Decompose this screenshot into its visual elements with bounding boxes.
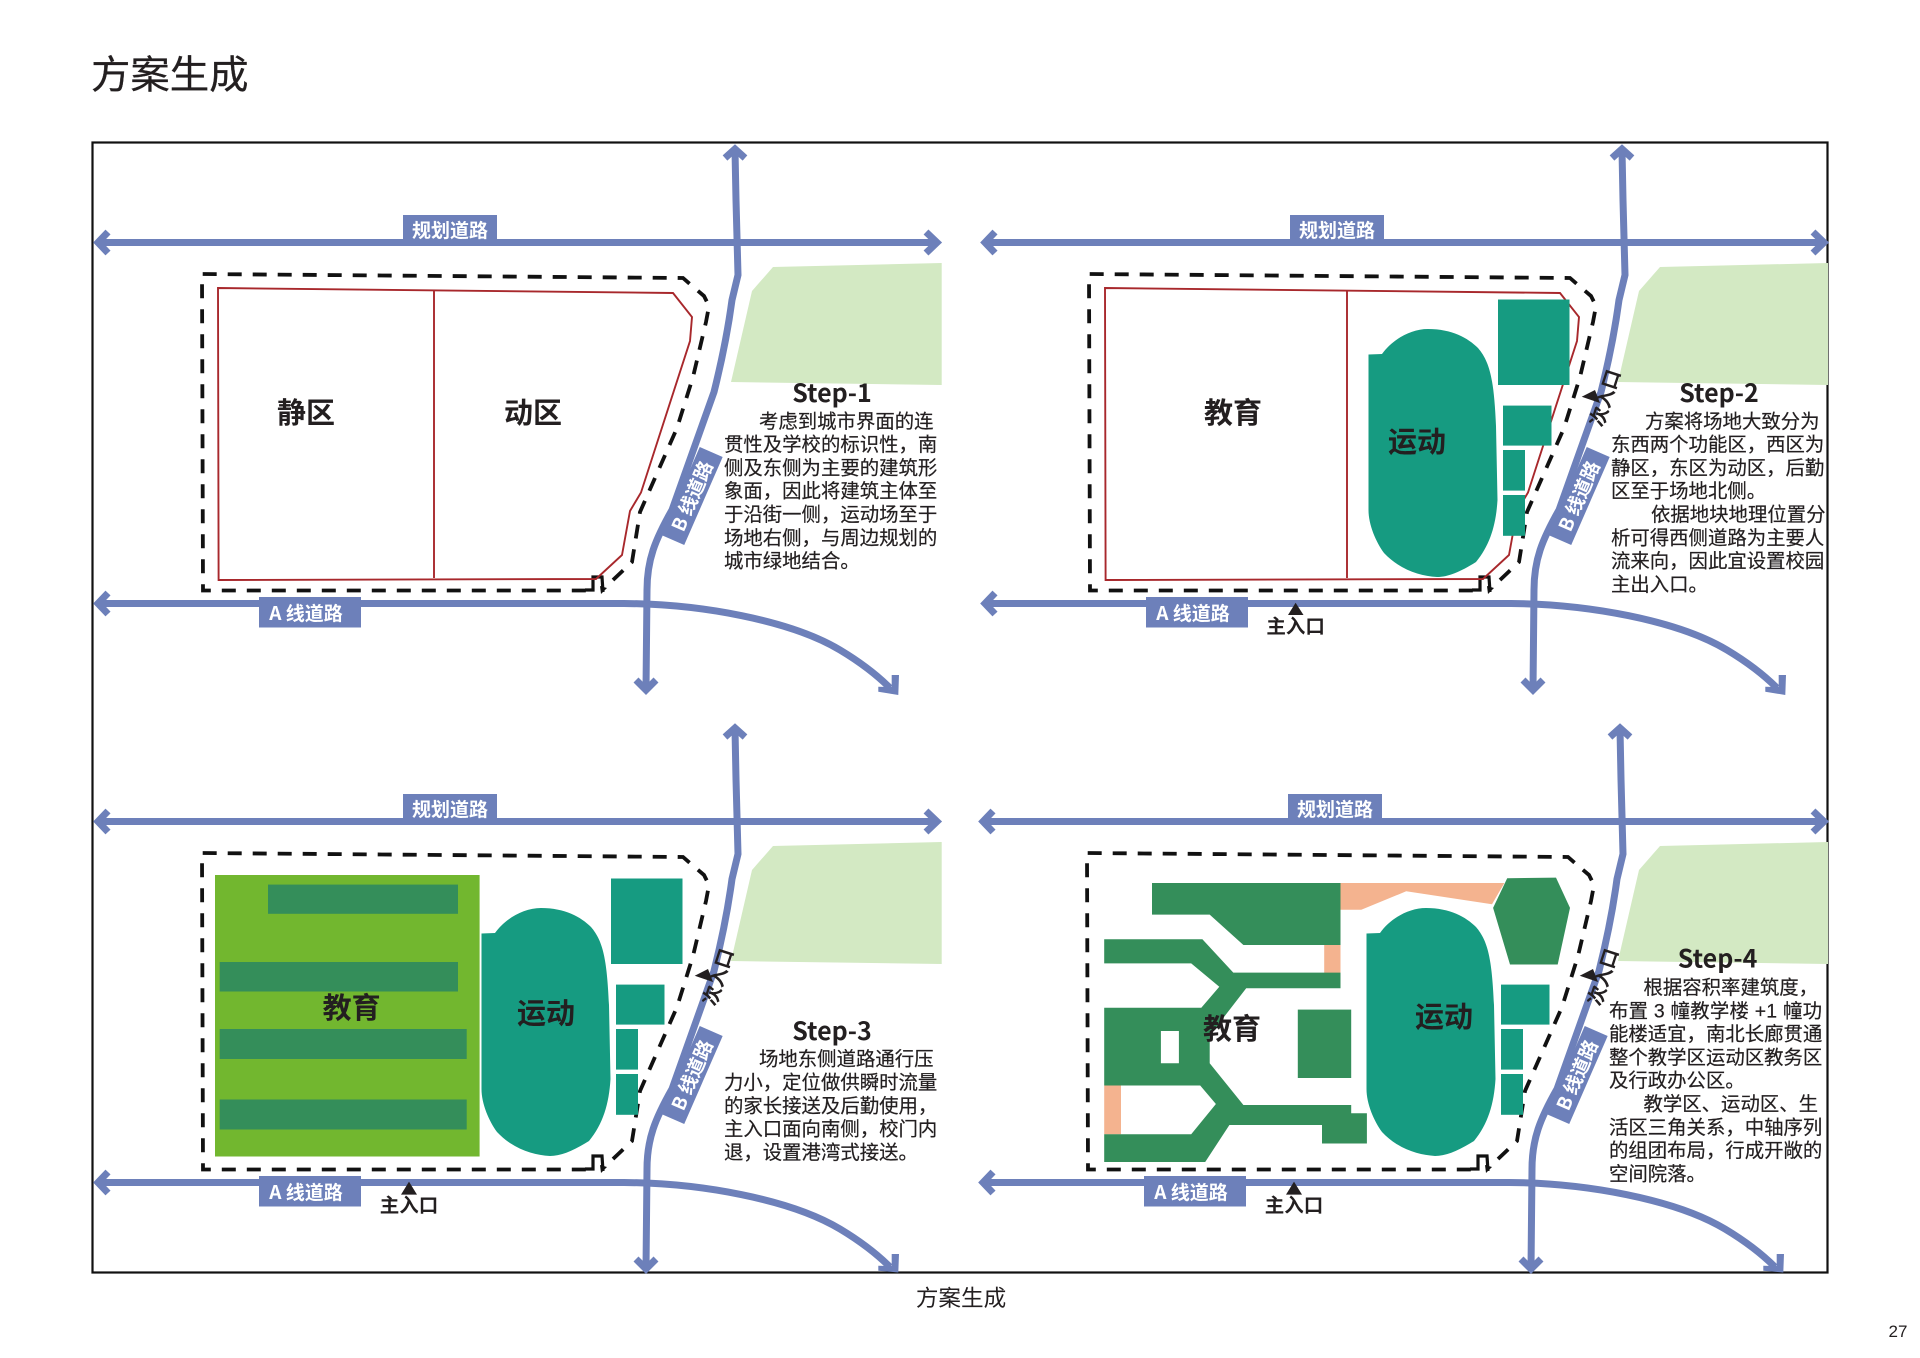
zone label: education: 教育 xyxy=(323,992,381,1025)
text block: step 2: 区至于场地北侧。 xyxy=(1611,481,1766,503)
outer frame xyxy=(92,142,1828,1272)
zone label: quiet: 静区 xyxy=(277,397,335,430)
sports field xyxy=(482,908,610,1156)
text block: step 2: 方案将场地大致分为 xyxy=(1645,411,1820,433)
text block: step 1: 考虑到城市界面的连 xyxy=(759,411,934,433)
label: road B xyxy=(660,446,723,545)
heading: step 2: Step-2 xyxy=(1679,374,1759,410)
panel: step 1 xyxy=(98,149,942,695)
label: road A: A 线道路 xyxy=(1153,1178,1228,1205)
site base map step 2 xyxy=(985,149,1828,695)
text block: step 4: 布置 3 幢教学楼 +1 幢功 xyxy=(1609,1000,1822,1022)
text block: step 4: 教学区、运动区、生 xyxy=(1644,1094,1818,1116)
label: road B xyxy=(660,1025,723,1124)
label: planning road: 规划道路 xyxy=(412,795,488,822)
figure caption: 方案生成 xyxy=(916,1280,1006,1313)
text block: step 3: 力小，定位做供瞬时流量 xyxy=(724,1072,937,1094)
site base map step 1 xyxy=(98,149,942,695)
label: road B: B 线道路 xyxy=(1549,1035,1604,1114)
text block: step 4: 活区三角关系，中轴序列 xyxy=(1609,1117,1822,1139)
label: road A: A 线道路 xyxy=(1155,599,1230,626)
sports buildings xyxy=(1498,300,1570,536)
text block: step 2: 依据地块地理位置分 xyxy=(1651,504,1826,526)
label: road A: A 线道路 xyxy=(268,1178,343,1205)
label: road B: B 线道路 xyxy=(664,456,719,535)
text block: step 4: 空间院落。 xyxy=(1609,1163,1706,1185)
zone label: sports: 运动 xyxy=(517,999,575,1031)
label: road B xyxy=(1547,446,1610,545)
zone label: sports: 运动 xyxy=(1388,427,1446,459)
text block: step 2 xyxy=(1611,411,1826,596)
label: road B: B 线道路 xyxy=(1551,456,1606,535)
panel: step 2 xyxy=(985,149,1828,695)
text block: step 1: 象面，因此将建筑主体至 xyxy=(724,481,937,503)
heading: step 1: Step-1 xyxy=(792,374,872,410)
text block: step 1: 于沿街一侧，运动场至于 xyxy=(724,504,937,526)
connecting corridors xyxy=(1104,883,1504,1134)
panel: step 3 xyxy=(98,728,942,1272)
label: road A xyxy=(1144,1176,1246,1206)
text block: step 3: 场地东侧道路通行压 xyxy=(759,1049,934,1071)
panel: step 4 xyxy=(983,728,1828,1272)
site base map step 4 xyxy=(983,728,1828,1272)
site boundary and zones xyxy=(218,288,692,580)
text block: step 2: 析可得西侧道路为主要人 xyxy=(1611,527,1824,549)
page number: 27 xyxy=(1889,1322,1907,1341)
label: road A: A 线道路 xyxy=(268,599,343,626)
label: planning road: 规划道路 xyxy=(1297,795,1373,822)
text block: step 4: 根据容积率建筑度， xyxy=(1644,977,1818,999)
text block: step 3: 主入口面向南侧，校门内 xyxy=(724,1119,937,1141)
sports field xyxy=(1368,329,1498,577)
label: road A xyxy=(259,597,361,628)
text block: step 4: 的组团布局，行成开敞的 xyxy=(1609,1140,1822,1162)
text block: step 2: 东西两个功能区，西区为 xyxy=(1611,434,1824,456)
text block: step 2: 静区，东区为动区，后勤 xyxy=(1611,457,1824,479)
text block: step 3: 退，设置港湾式接送。 xyxy=(724,1142,918,1164)
teaching buildings xyxy=(1104,878,1570,1162)
sports field xyxy=(1366,908,1496,1156)
heading: step 4: Step-4 xyxy=(1678,940,1758,976)
main entrance xyxy=(1266,603,1325,638)
secondary entrance: 次入口 xyxy=(699,946,738,1009)
text block: step 4 xyxy=(1609,977,1822,1185)
secondary entrance: 次入口 xyxy=(1584,946,1623,1009)
main entrance xyxy=(380,1182,438,1217)
main entrance xyxy=(1265,1182,1323,1217)
text block: step 4: 及行政办公区。 xyxy=(1609,1070,1745,1092)
sports buildings xyxy=(1501,985,1550,1115)
text block: step 1: 侧及东侧为主要的建筑形 xyxy=(724,457,937,479)
zone label: active: 动区 xyxy=(504,398,562,430)
text block: step 2: 主出入口。 xyxy=(1611,574,1708,596)
text block: step 1: 贯性及学校的标识性，南 xyxy=(724,434,937,456)
zone label: sports: 运动 xyxy=(1415,1002,1473,1034)
main entrance: 主入口 xyxy=(1266,616,1325,638)
main entrance: 主入口 xyxy=(380,1195,438,1217)
education zone xyxy=(215,875,480,1156)
label: road A xyxy=(1146,597,1248,628)
label: planning road: 规划道路 xyxy=(412,216,488,243)
text block: step 3 xyxy=(724,1049,937,1164)
secondary entrance: 次入口 xyxy=(1586,367,1625,430)
text block: step 1 xyxy=(724,411,937,573)
label: planning road: 规划道路 xyxy=(1299,216,1375,243)
label: road B xyxy=(1545,1025,1608,1124)
text block: step 4: 能楼适宜，南北长廊贯通 xyxy=(1609,1024,1822,1046)
main entrance: 主入口 xyxy=(1265,1195,1323,1217)
label: road B: B 线道路 xyxy=(664,1035,719,1114)
text block: step 2: 流来向，因此宜设置校园 xyxy=(1611,551,1824,573)
text block: step 3: 的家长接送及后勤使用， xyxy=(724,1095,937,1117)
site base map step 3 xyxy=(98,728,942,1272)
text block: step 1: 城市绿地结合。 xyxy=(724,551,860,573)
zone label: education: 教育 xyxy=(1204,397,1262,430)
title: 方案生成 xyxy=(91,44,249,100)
heading: step 3: Step-3 xyxy=(792,1012,872,1048)
text block: step 4: 整个教学区运动区教务区 xyxy=(1609,1047,1822,1069)
sports buildings xyxy=(611,878,682,1115)
label: road A xyxy=(259,1176,361,1206)
text block: step 1: 场地右侧，与周边规划的 xyxy=(724,527,937,549)
zone label: education: 教育 xyxy=(1203,1013,1261,1046)
